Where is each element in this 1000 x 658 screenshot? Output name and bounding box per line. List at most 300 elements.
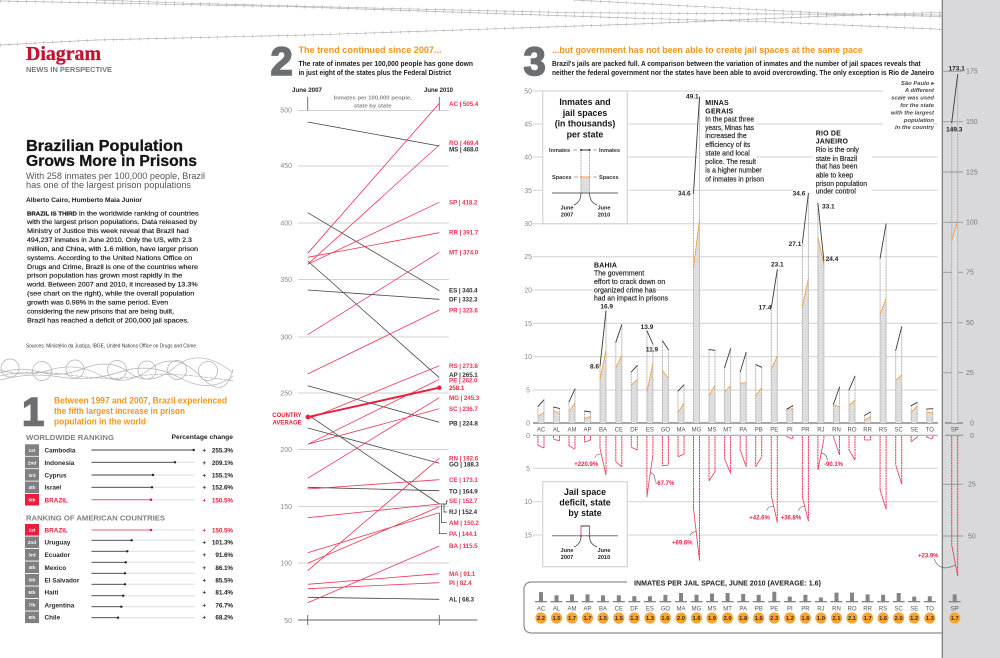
- state value labels: AL | 68.3: [449, 596, 474, 604]
- state codes: SE: [910, 607, 918, 613]
- country average line: [272, 386, 441, 426]
- rank squares: 6th: [29, 590, 36, 595]
- state value labels: PR | 323.6: [449, 308, 478, 314]
- bar: BA: [600, 311, 606, 423]
- grid and axis for state chart: 30: [524, 221, 532, 228]
- state value labels: RR | 391.7: [449, 230, 479, 236]
- legend: inmates and jail spaces: jail spaces: [562, 108, 607, 118]
- body text: BRAZIL IS THIRD in the worldwide ranking of countries: [27, 210, 199, 217]
- section label: Diagram: NEWS IN PERSPECTIVE: [26, 65, 112, 74]
- panel: worldwide ranking: WORLDWIDE RANKING: [26, 433, 114, 442]
- state value labels: MG | 245.3: [449, 395, 480, 402]
- state value labels: ES | 340.4: [449, 288, 478, 294]
- ratio values: 1.0: [817, 616, 825, 622]
- percentage values: +: [202, 603, 206, 610]
- deficit percentages: [574, 462, 939, 559]
- byline: Alberto Cairo, Humberto Maia Junior: [26, 197, 142, 204]
- legend: jail space deficit: 2010: [598, 555, 610, 561]
- annotation: Minas Gerais: GERAIS: [705, 108, 733, 115]
- grid and axis for state chart: 10: [524, 354, 532, 361]
- subtitle: With 258 inmates per 100,000 people, Brazil: [26, 171, 205, 181]
- legend: jail space deficit: by state: [568, 508, 602, 518]
- bar: AM: [569, 389, 575, 423]
- red lines: states going up: [308, 103, 439, 603]
- Sao Paulo axis: 75: [966, 270, 974, 276]
- section 2 header: [270, 40, 473, 84]
- ratio values: 1.6: [661, 616, 670, 622]
- percentage values: 68.2%: [215, 615, 233, 622]
- deficit percentages: -67.7%: [655, 481, 675, 487]
- panel: inmates per jail space: INMATES PER JAIL SPACE, JUNE 2010 (AVERAGE: 1.6): [634, 578, 821, 588]
- subheading 2: The rate of inmates per 100,000 people has gone down: [298, 61, 473, 68]
- ratio values: 1.5: [615, 616, 624, 622]
- legend: inmates and jail spaces: Spaces: [599, 175, 619, 181]
- value labels on bars: 149.3: [946, 126, 963, 133]
- subheading 2: in just eight of the states plus the Federal District: [298, 70, 452, 77]
- ratio values: 1.5: [552, 616, 561, 622]
- bar: CE: [616, 325, 622, 423]
- ratio values: 1.8: [739, 616, 748, 622]
- state value labels: SC | 236.7: [449, 406, 478, 413]
- body text: (see chart on the right), while the overall population: [27, 291, 195, 298]
- section 3 header: [524, 40, 934, 84]
- state value labels: PE | 262.0: [449, 378, 478, 384]
- state value labels: [449, 101, 480, 603]
- panel: worldwide ranking: [25, 433, 233, 506]
- connectors to SE RJ AM PA labels: [439, 501, 448, 534]
- state labels: RJ: [817, 428, 825, 434]
- body text: Brazil has reached a deficit of 200,000 jail spaces.: [27, 317, 189, 324]
- body text: [26, 210, 199, 324]
- row: Cambodia: 255.3%: [212, 447, 233, 454]
- state value labels: AM | 150.2: [449, 520, 479, 527]
- ratio values: 2.2: [537, 616, 545, 622]
- Sao Paulo axis: 100: [966, 220, 978, 226]
- value labels on bars: 8.6: [590, 363, 599, 370]
- annotation: Sao Paulo: for the state: [900, 103, 935, 109]
- state codes: SC: [895, 607, 904, 613]
- value labels on bars: 27.1: [789, 241, 802, 248]
- state labels: AL: [553, 428, 561, 434]
- grid and axis for state chart: 50: [524, 88, 532, 96]
- percentage values: +: [202, 552, 206, 559]
- bar: MS: [709, 350, 715, 423]
- grid and axis for state chart: 10: [524, 499, 532, 506]
- bar: SC: [896, 327, 902, 423]
- row: Indonesia: 2nd: [28, 460, 36, 465]
- state labels: [537, 428, 959, 434]
- row: Cambodia: [25, 444, 233, 456]
- state codes: MS: [708, 607, 716, 613]
- legend: inmates and jail spaces: Inmates and: [559, 97, 611, 107]
- row: Israel: 152.6%: [212, 485, 233, 492]
- heading 2: The trend continued since 2007...: [298, 45, 442, 55]
- annotation: Rio de Janeiro: Rio is the only: [816, 147, 860, 154]
- deficit callout curves: [595, 453, 955, 568]
- row: Brazil: +: [202, 497, 206, 504]
- state labels: CE: [615, 428, 623, 434]
- row: Cambodia: 1st: [29, 448, 36, 453]
- ratio values: 1.6: [801, 616, 810, 622]
- axis and grid: Inmates per 100,000 people,: [334, 96, 412, 102]
- state codes: ES: [646, 607, 654, 613]
- Sao Paulo axis: 50: [966, 320, 974, 327]
- annotation: Minas Gerais: state and local: [705, 151, 750, 158]
- row: Cyprus: 155.1%: [212, 472, 233, 479]
- numeral 1: 1: [22, 390, 44, 434]
- state codes: PR: [801, 607, 810, 613]
- state value labels: RJ | 152.4: [449, 509, 478, 516]
- panel: worldwide ranking: Percentage change: [172, 434, 233, 441]
- row: Cyprus: [25, 469, 233, 481]
- state codes: MG: [692, 607, 702, 613]
- country names: Argentina: [44, 603, 75, 610]
- annotation: Bahia: [594, 262, 669, 303]
- value labels on bars: 33.1: [822, 203, 835, 210]
- value labels on bars: 49.1: [686, 94, 699, 100]
- state codes: MT: [723, 607, 732, 613]
- slope chart: [272, 87, 480, 625]
- numeral 2: 2: [270, 40, 293, 84]
- grid and axis for state chart: 15: [524, 321, 532, 328]
- state codes: BA: [599, 607, 607, 613]
- percentage values: +: [202, 615, 206, 622]
- Sao Paulo axis: 25: [966, 370, 974, 377]
- sources: Sources: Ministério da Justiça, IBGE, United Nations Office on Drugs and Crime: [26, 344, 196, 350]
- state labels: RR: [863, 428, 873, 434]
- percentage values: 85.5%: [215, 577, 233, 584]
- annotation: Minas Gerais: [705, 100, 764, 183]
- state codes: AC: [537, 607, 546, 613]
- ratio values: 1.7: [951, 616, 959, 622]
- row: Brazil: 150.5%: [212, 497, 233, 504]
- panel: gray Sao Paulo column: [942, 0, 1000, 658]
- ratio values: 1.2: [910, 616, 918, 622]
- title: Brazilian Population: [26, 138, 183, 155]
- row: Brazil: [25, 494, 233, 506]
- grid and axis for state chart: 20: [524, 288, 532, 294]
- state labels: MT: [723, 428, 732, 434]
- ratio values: 1.6: [692, 616, 701, 622]
- ratio values: 1.7: [864, 616, 872, 622]
- row: Cyprus: 3rd: [28, 473, 36, 478]
- axis and grid: 300: [280, 334, 292, 342]
- legend: inmates and jail spaces: 2010: [598, 212, 610, 218]
- heading 3: ...but government has not been able to create jail spaces at the same pace: [552, 45, 863, 55]
- legend: inmates and jail spaces: [543, 91, 627, 224]
- annotation: Sao Paulo: population: [903, 118, 934, 124]
- Sao Paulo axis: 175: [966, 68, 978, 76]
- deficit vertical lines: [538, 436, 958, 576]
- grid and axis for state chart: 0: [526, 420, 530, 428]
- row: Israel: [25, 482, 233, 493]
- value labels on bars: 11.9: [646, 347, 659, 354]
- legend: jail space deficit: [543, 482, 627, 567]
- country names: BRAZIL: [44, 527, 68, 534]
- percentage values: 101.3%: [212, 540, 233, 547]
- state labels: SC: [895, 428, 904, 434]
- country names: Ecuador: [44, 552, 71, 559]
- legend: jail space deficit: 2007: [561, 555, 573, 561]
- state labels: TO: [926, 428, 934, 434]
- bar: RO: [849, 376, 855, 423]
- row: Indonesia: +: [202, 460, 206, 467]
- state value labels: SE | 152.7: [449, 498, 478, 505]
- grid and axis for state chart: 45: [524, 122, 532, 128]
- bar: AL: [554, 407, 560, 423]
- state value labels: RS | 273.8: [449, 363, 478, 370]
- state codes: PI: [787, 607, 793, 613]
- bar: GO: [662, 341, 668, 423]
- state labels: RO: [848, 428, 857, 434]
- annotation: Bahia: BAHIA: [594, 262, 617, 269]
- bar: MA: [678, 385, 684, 423]
- state value labels: MT | 374.0: [449, 250, 479, 256]
- legend: jail space deficit: June: [597, 548, 611, 554]
- deficit percentages: -90.1%: [824, 462, 844, 468]
- state value labels: MA | 91.1: [449, 571, 476, 578]
- body text: prison population has grown most rapidly in the: [27, 273, 183, 280]
- annotation: Sao Paulo: A different: [904, 88, 935, 94]
- bar: PE: [771, 270, 777, 423]
- annotation: Rio de Janeiro: under control: [816, 189, 856, 196]
- heading 1: population in the world: [54, 416, 146, 426]
- state labels: BA: [599, 428, 607, 434]
- state value labels: MS | 468.0: [449, 146, 479, 154]
- section label: Diagram: Diagram: [26, 44, 101, 65]
- state codes: AP: [583, 607, 592, 613]
- annotation: Sao Paulo: scale was used: [891, 96, 934, 102]
- rank squares: 7th: [29, 603, 36, 608]
- percentage values: 86.1%: [215, 565, 233, 572]
- deficit percentages: +36.8%: [781, 515, 802, 521]
- axis and grid: 50: [284, 618, 292, 625]
- legend: inmates and jail spaces: 2007: [561, 212, 573, 218]
- rank squares: 8th: [29, 615, 36, 620]
- percentage values: +: [202, 577, 206, 584]
- deficit percentages: +69.6%: [672, 540, 693, 546]
- state labels: SP: [951, 428, 959, 434]
- state codes: SP: [951, 607, 959, 613]
- state value labels: AC | 505.4: [449, 101, 479, 108]
- state codes: RN: [832, 607, 841, 613]
- annotation: Minas Gerais: MINAS: [705, 100, 729, 107]
- state labels: DF: [630, 428, 639, 434]
- Sao Paulo axis: 150: [966, 119, 978, 126]
- axis and grid: 500: [280, 108, 292, 114]
- state value labels: CE | 173.1: [449, 477, 478, 484]
- deficit slopes: [538, 437, 958, 576]
- person-stack icons: [535, 592, 961, 602]
- state labels: AP: [583, 428, 592, 434]
- grid and axis for state chart: 40: [524, 154, 532, 162]
- ratio values: 1.3: [630, 616, 639, 622]
- ratio values: 2.0: [895, 616, 903, 622]
- axis and grid: 350: [280, 277, 292, 284]
- state codes: DF: [630, 607, 639, 613]
- annotation: Minas Gerais: years, Minas has: [705, 125, 755, 132]
- subheading 3: [552, 61, 934, 77]
- barbed wire divider: [0, 358, 233, 387]
- state labels: SE: [910, 428, 918, 434]
- body text: growth was 0.98% in the same period. Even: [27, 300, 169, 306]
- state codes: RS: [879, 607, 887, 613]
- deficit percentages: +23.9%: [918, 553, 939, 559]
- state codes: [537, 607, 959, 613]
- state value labels: RN | 192.6: [449, 456, 479, 462]
- annotation: Minas Gerais: police. The result: [705, 159, 756, 166]
- row: Cambodia: Cambodia: [44, 447, 76, 454]
- axis and grid: state by state: [354, 104, 392, 110]
- section 1: [22, 390, 227, 434]
- subtitle: [26, 171, 205, 190]
- rank squares: 1st: [29, 528, 36, 533]
- ratio values: 1.3: [646, 616, 655, 622]
- state labels: PR: [801, 428, 810, 434]
- Sao Paulo axis: 0: [970, 420, 974, 428]
- legend: inmates and jail spaces: (in thousands): [555, 118, 615, 128]
- value labels on bars: 17.4: [759, 304, 772, 311]
- section label: Diagram: [26, 44, 112, 74]
- ratio values: 1.3: [926, 616, 935, 622]
- country average line: AVERAGE: [272, 420, 302, 426]
- legend: inmates and jail spaces: June: [597, 206, 611, 212]
- value labels on bars: 34.6: [678, 190, 691, 197]
- annotation: Rio de Janeiro: RIO DE: [816, 130, 841, 137]
- axis and grid: 400: [280, 220, 292, 228]
- axis and grid: 100: [280, 560, 292, 568]
- percentage values: [202, 527, 233, 622]
- row: Cyprus: +: [202, 472, 206, 479]
- state labels: AC: [537, 428, 546, 434]
- state labels: GO: [661, 428, 670, 434]
- rank squares: 2nd: [28, 540, 36, 545]
- grid and axis for state chart: 25: [524, 254, 532, 261]
- value labels on bars: 16.9: [600, 303, 613, 310]
- legend: inmates and jail spaces: Spaces: [552, 175, 572, 181]
- row: Israel: 4th: [29, 485, 36, 490]
- state labels: RS: [879, 428, 887, 434]
- percentage values: +: [202, 540, 206, 547]
- body text: 494,237 inmates in June 2010. Only the US, with 2.3: [27, 237, 192, 244]
- black lines: states going down: [308, 122, 439, 599]
- grid and axis for state chart: 35: [524, 188, 532, 195]
- axis and grid: 150: [280, 504, 292, 511]
- axis and grid: June 2007: [292, 87, 323, 94]
- state codes: PB: [755, 607, 763, 613]
- ratio values: 1.6: [879, 616, 888, 622]
- body text: million, and China, with 1.6 million, have larger prison: [27, 246, 198, 253]
- percentage values: 81.4%: [215, 590, 233, 597]
- rank squares: [25, 524, 39, 623]
- ratio values: 2.3: [770, 616, 779, 622]
- state labels: PA: [739, 428, 747, 434]
- state value labels: PI | 82.4: [449, 580, 472, 587]
- state value labels: PB | 224.8: [449, 420, 478, 428]
- state labels: PI: [787, 428, 793, 434]
- value labels on bars: 13.9: [641, 324, 654, 331]
- annotation: Minas Gerais: efficiency of its: [705, 142, 751, 149]
- state value labels: PA | 144.1: [449, 531, 478, 538]
- grid and axis for state chart: 15: [524, 532, 532, 540]
- state labels: AM: [568, 428, 577, 434]
- country names: Mexico: [44, 565, 66, 572]
- bar: MT: [725, 349, 731, 423]
- bar: SE: [911, 402, 917, 423]
- ratio values: 1.6: [755, 616, 764, 622]
- country names: Uruguay: [44, 540, 71, 547]
- country average line: COUNTRY: [272, 413, 302, 419]
- legend: inmates and jail spaces: Inmates: [599, 148, 620, 154]
- subheading 2: [298, 61, 473, 77]
- annotation: Sao Paulo: [891, 81, 935, 131]
- annotation: Rio de Janeiro: [816, 130, 867, 196]
- annotation: Bahia: effort to crack down on: [594, 279, 665, 286]
- subheading 3: neither the federal government nor the states have been able to avoid overcrowding. The only exception is Rio de Janeiro: [552, 70, 934, 77]
- legend: jail space deficit: June: [560, 548, 574, 554]
- heading 1: the fifth largest increase in prison: [54, 406, 185, 416]
- annotation: Sao Paulo: São Paulo ▸: [901, 81, 935, 87]
- panel: ranking of American countries: [25, 513, 233, 623]
- percentage values: 91.6%: [215, 552, 233, 559]
- percentage values: 76.7%: [215, 603, 233, 610]
- ratio values: 1.2: [786, 616, 794, 622]
- orange value circles: [535, 612, 960, 624]
- bar: RJ: [818, 203, 824, 423]
- axis and grid: 250: [280, 390, 292, 398]
- state labels: MS: [708, 428, 716, 434]
- state codes: CE: [615, 607, 623, 613]
- axis and grid: June 2010: [424, 87, 454, 94]
- bars: inmates and spaces per state: [538, 74, 958, 423]
- numeral 3: 3: [524, 40, 546, 84]
- annotation: Bahia: had an impact in prisons: [594, 296, 669, 303]
- axis and grid: [280, 87, 478, 625]
- state codes: GO: [661, 607, 670, 613]
- value labels on bars: 24.4: [826, 256, 839, 263]
- annotation: Rio de Janeiro: able to keep: [816, 173, 853, 180]
- grid and axis for state chart: 5: [526, 388, 530, 394]
- ratio values: [537, 616, 959, 622]
- title: Grows More in Prisons: [26, 153, 197, 170]
- annotation: Minas Gerais: of inmates in prison: [705, 176, 764, 183]
- state labels: MA: [676, 428, 686, 434]
- Sao Paulo axis: 0: [970, 433, 974, 440]
- annotation: Bahia: organized crime has: [594, 288, 657, 295]
- Sao Paulo axis: 125: [966, 170, 978, 176]
- annotation: Rio de Janeiro: JANEIRO: [816, 139, 849, 146]
- annotation: Minas Gerais: In the past three: [705, 116, 754, 123]
- state labels: PE: [770, 428, 778, 434]
- state codes: RR: [863, 607, 873, 613]
- state value labels: RO | 469.4: [449, 140, 479, 147]
- state value labels: BA | 115.5: [449, 543, 478, 550]
- axis and grid: 450: [280, 163, 292, 170]
- state value labels: AP | 265.1: [449, 372, 478, 379]
- state value labels: DF | 332.3: [449, 296, 478, 304]
- annotation: Minas Gerais: is a higher number: [705, 168, 762, 175]
- deficit percentages: +42.6%: [749, 515, 770, 521]
- body text: with the largest prison populations. Data released by: [26, 219, 198, 226]
- percentage values: +: [202, 590, 206, 597]
- state labels: MG: [692, 428, 702, 434]
- legend: jail space deficit: deficit, state: [559, 498, 611, 508]
- value labels on bars: [590, 65, 965, 370]
- state value labels: TO | 164.9: [449, 488, 478, 496]
- state codes: PE: [770, 607, 778, 613]
- state labels: ES: [646, 428, 654, 434]
- row: Brazil: 5th: [29, 498, 36, 503]
